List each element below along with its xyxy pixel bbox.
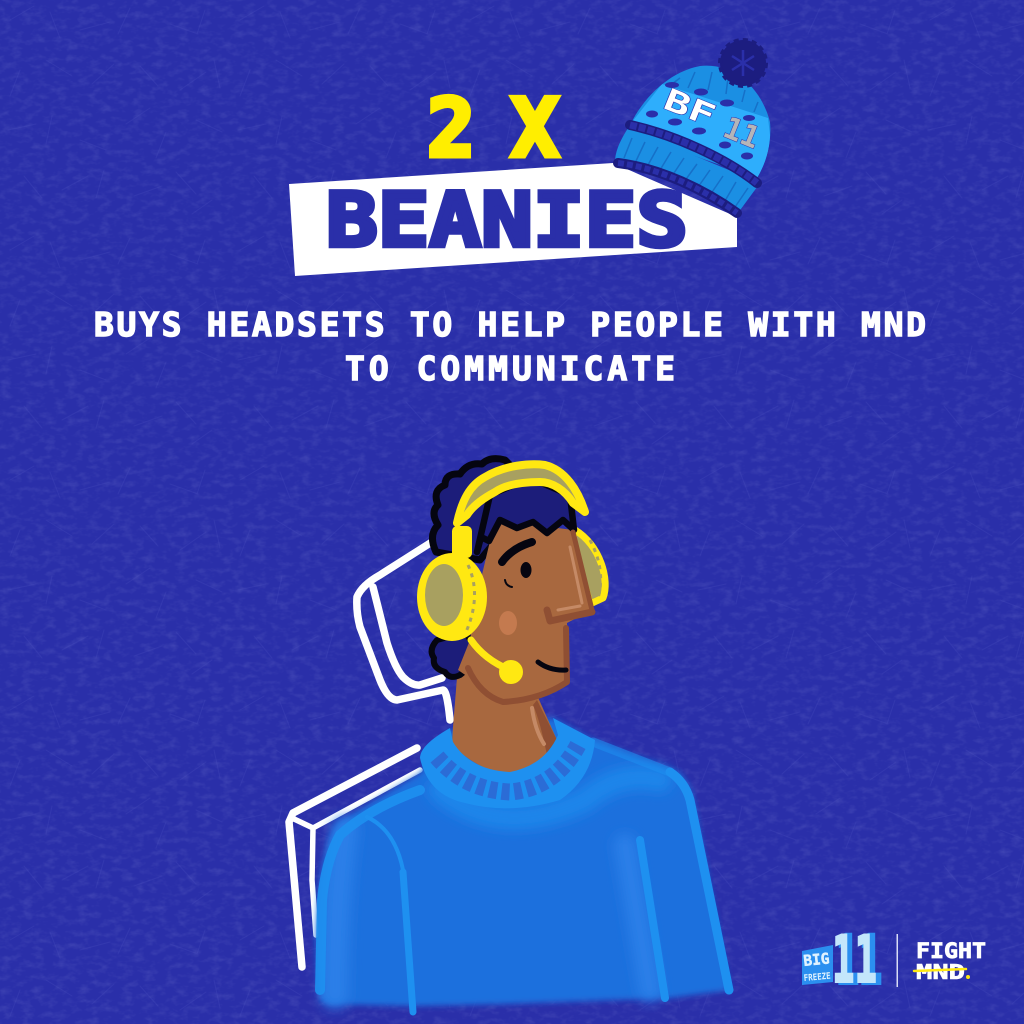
- hat lettering BF: BF: [659, 82, 720, 134]
- sweater body: [316, 718, 730, 1006]
- hat lettering 11: 11: [718, 110, 765, 156]
- banner word: BEANIES: [326, 176, 688, 264]
- strike through: [914, 969, 966, 971]
- chair outline: [289, 540, 450, 967]
- neck shadow: [533, 700, 557, 760]
- top hair: [477, 478, 574, 552]
- back hair: [432, 459, 530, 560]
- hat dots: [646, 82, 755, 160]
- banner: beanies: [289, 163, 737, 276]
- hat upper rib: [630, 125, 757, 183]
- collar: [420, 718, 595, 808]
- neck highlight: [532, 708, 544, 744]
- fight word: FIGHT: [916, 939, 986, 963]
- headband: [457, 464, 585, 523]
- big freeze plate: [802, 945, 833, 985]
- hat brim ribs: [624, 138, 748, 210]
- lower hair: [432, 632, 474, 677]
- full stop: [966, 975, 970, 979]
- logo divider: [896, 934, 898, 987]
- hat crown ribs: [672, 72, 758, 112]
- hat brim: [615, 128, 760, 213]
- eyebrow: [502, 542, 532, 562]
- subtitle line one: BUYS HEADSETS TO HELP PEOPLE WITH MND: [94, 305, 926, 344]
- hat crown: [627, 66, 770, 178]
- sweater soft shading: [335, 778, 660, 995]
- wrinkle: [505, 580, 512, 587]
- hat patterned band: [632, 84, 770, 178]
- big word: BIG: [803, 949, 830, 970]
- right earcup: [572, 530, 605, 604]
- hat lower rib: [618, 163, 737, 213]
- sweater highlights: [320, 742, 729, 1012]
- illustration: person with headset: [289, 459, 730, 1012]
- logo: big freeze 11: [802, 922, 882, 999]
- eye: [520, 562, 532, 578]
- face: [458, 520, 592, 702]
- logo: fight mnd: [914, 939, 986, 984]
- heading: 2 X: 2 X: [427, 82, 559, 175]
- face shading: [468, 532, 592, 702]
- subtitle line two: TO COMMUNICATE: [345, 349, 675, 388]
- mnd word: MND: [916, 960, 965, 984]
- freeze word: FREEZE: [803, 972, 831, 984]
- white banner shape: [289, 163, 737, 276]
- neck: [452, 665, 557, 774]
- icon: bobble hat: [615, 40, 770, 213]
- microphone: [471, 640, 523, 684]
- cheek: [499, 611, 517, 635]
- mouth: [538, 662, 566, 670]
- left earcup: [417, 526, 487, 641]
- 11 numeral shadow: 11: [836, 922, 882, 999]
- hat pompom: [720, 40, 766, 86]
- 11 numeral: 11: [832, 923, 877, 998]
